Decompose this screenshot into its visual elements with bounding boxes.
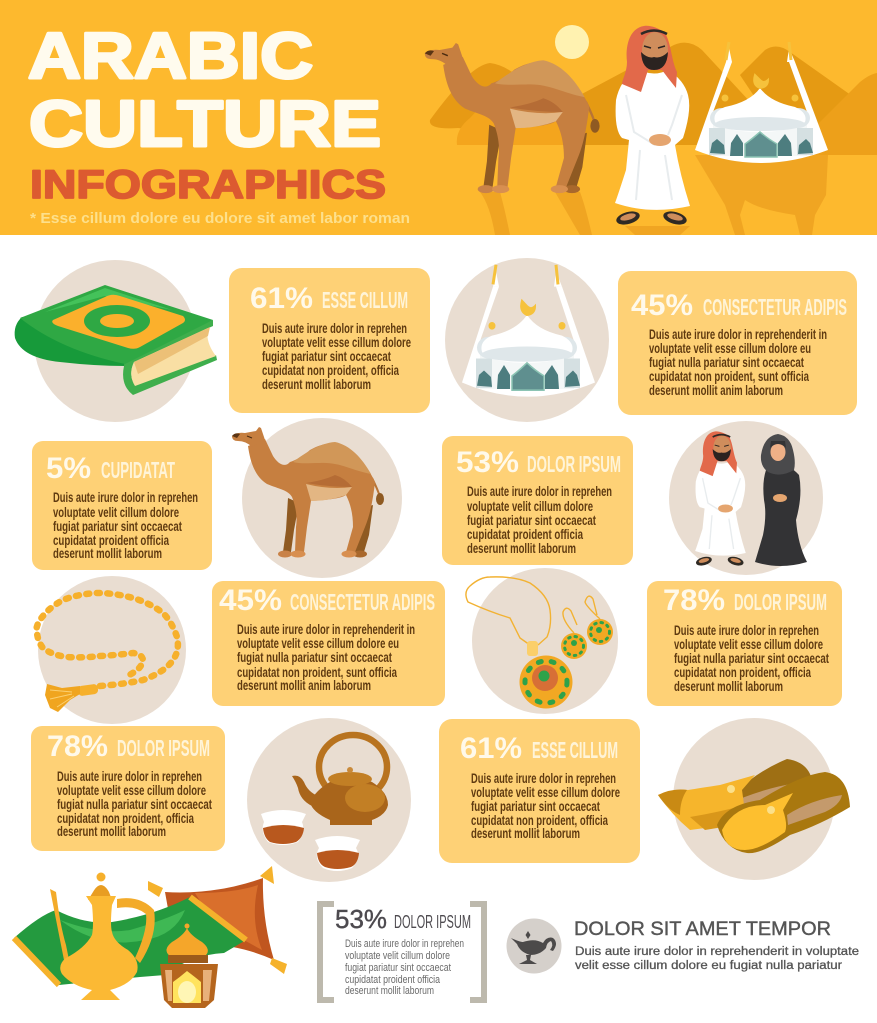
panel: 61% esse cillum second: deserunt mollit laborum (471, 826, 580, 841)
man (695, 431, 746, 567)
icon: holy book (15, 260, 217, 422)
bracket panel: 53% dolor ipsum: Duis aute irure dolor in reprehen (345, 938, 464, 950)
icon: slippers (658, 718, 850, 880)
camel (425, 43, 600, 193)
panel: 61% esse cillum: cupidatat non proident, officia (262, 363, 399, 378)
panel: 5% cupidatat: deserunt mollit laborum (53, 546, 162, 561)
panel: 61% esse cillum: deserunt mollit laborum (262, 377, 371, 392)
bracket panel: 53% dolor ipsum: voluptate velit cillum dolore (345, 950, 450, 962)
icon: teapot and cups (247, 718, 411, 882)
panel: 5% cupidatat: cupidatat proident officia (53, 533, 169, 548)
illustration: jug, pillows and lantern (14, 866, 287, 1008)
bracket panel: 53% dolor ipsum: fugiat pariatur sint occaecat (345, 962, 451, 974)
panel: 5% cupidatat (32, 441, 212, 570)
panel: 45% consectetur adipis second: CONSECTETUR ADIPIS (290, 589, 435, 615)
bracket panel: 53% dolor ipsum: 53% (335, 904, 387, 934)
panel: 61% esse cillum second: Duis aute irure dolor in reprehen (471, 771, 616, 786)
panel: 45% consectetur adipis second: fugiat nulla pariatur sint occaecat (237, 650, 392, 665)
panel: 45% consectetur adipis second: voluptate velit esse cillum dolore eu (237, 636, 399, 651)
panel: 61% esse cillum: voluptate velit esse cillum dolore (262, 335, 411, 350)
man in white robe (615, 26, 690, 227)
panel: 78% dolor ipsum left (31, 726, 225, 851)
panel: 45% consectetur adipis (618, 271, 857, 415)
panel: 61% esse cillum (229, 268, 430, 413)
panel: 45% consectetur adipis second: deserunt mollit anim laborum (237, 678, 371, 693)
panel: 53% dolor ipsum: cupidatat proident officia (467, 527, 583, 542)
header banner (0, 0, 877, 235)
mosque (695, 42, 828, 163)
panel: 53% dolor ipsum: 53% (456, 446, 519, 479)
panel: 53% dolor ipsum: fugiat pariatur sint occaecat (467, 513, 596, 528)
icon: magic lamp (506, 918, 562, 974)
sun (555, 25, 589, 59)
red pillow (148, 866, 287, 974)
panel: 61% esse cillum second: 61% (460, 732, 522, 765)
bracket panel: 53% dolor ipsum (320, 904, 484, 1000)
panel: 61% esse cillum: ESSE CILLUM (322, 287, 408, 313)
panel: 45% consectetur adipis second: Duis aute irure dolor in reprehenderit in (237, 622, 415, 637)
icon: prayer beads (36, 576, 186, 724)
bracket panel: 53% dolor ipsum: DOLOR IPSUM (394, 912, 471, 932)
panel: 5% cupidatat: fugiat pariatur sint occaecat (53, 519, 182, 534)
green pillow (14, 897, 246, 985)
callout text (575, 946, 859, 972)
panel: 61% esse cillum second: ESSE CILLUM (532, 737, 618, 763)
panel: 53% dolor ipsum: voluptate velit cillum dolore (467, 499, 593, 514)
icon: couple in circle (669, 421, 823, 575)
panel: 78% dolor ipsum right: 78% (663, 584, 725, 617)
panel: 78% dolor ipsum left: cupidatat non proident, officia (57, 811, 194, 826)
panel: 78% dolor ipsum left: voluptate velit esse cillum dolore (57, 783, 206, 798)
panel: 61% esse cillum: Duis aute irure dolor in reprehen (262, 321, 407, 336)
callout text: velit esse cillum dolore eu fugiat nulla pariatur (575, 960, 842, 972)
icon: mosque in circle (445, 258, 609, 422)
panel: 78% dolor ipsum left: Duis aute irure dolor in reprehen (57, 769, 202, 784)
panel: 78% dolor ipsum right: cupidatat non proident, officia (674, 665, 811, 680)
title: Culture: CULTURE (29, 87, 381, 160)
panel: 45% consectetur adipis: 45% (631, 289, 693, 322)
panel: 5% cupidatat: Duis aute irure dolor in reprehen (53, 490, 198, 505)
panel: 45% consectetur adipis: voluptate velit esse cillum dolore eu (649, 341, 811, 356)
panel: 53% dolor ipsum: deserunt mollit laborum (467, 541, 576, 556)
panel: 78% dolor ipsum left: DOLOR IPSUM (117, 735, 210, 761)
panel: 61% esse cillum: 61% (250, 282, 313, 315)
panel: 53% dolor ipsum: DOLOR IPSUM (527, 451, 621, 477)
icon: camel in circle (232, 418, 402, 578)
panel: 45% consectetur adipis second: 45% (219, 584, 282, 617)
panel: 61% esse cillum second: cupidatat non proident, officia (471, 813, 608, 828)
panel: 45% consectetur adipis: cupidatat non proident, sunt officia (649, 369, 809, 384)
panel: 61% esse cillum: fugiat pariatur sint occaecat (262, 349, 391, 364)
panel: 45% consectetur adipis second: cupidatat non proident, sunt officia (237, 665, 397, 680)
desert dunes (430, 43, 877, 155)
bracket panel: 53% dolor ipsum: cupidatat proident officia (345, 974, 441, 986)
subtitle: * Esse cillum dolore eu dolore sit amet labor roman (30, 210, 410, 227)
panel: 61% esse cillum second (439, 719, 640, 863)
panel: 78% dolor ipsum left: deserunt mollit laborum (57, 824, 166, 839)
panel: 45% consectetur adipis: fugiat nulla pariatur sint occaecat (649, 355, 804, 370)
icon: jewelry (466, 568, 618, 714)
panel: 5% cupidatat: 5% (46, 452, 91, 485)
panel: 53% dolor ipsum: Duis aute irure dolor in reprehen (467, 484, 612, 499)
panel: 61% esse cillum second: fugiat pariatur sint occaecat (471, 799, 600, 814)
panel: 5% cupidatat: voluptate velit cillum dolore (53, 505, 179, 520)
panel: 45% consectetur adipis second (212, 581, 445, 706)
panel: 45% consectetur adipis: deserunt mollit anim laborum (649, 383, 783, 398)
bracket panel: 53% dolor ipsum: deserunt mollit laborum (345, 985, 434, 997)
callout text: Duis aute irure dolor in reprehenderit in voluptate (575, 946, 859, 958)
title: Infographics: INFOGRAPHICS (30, 163, 386, 207)
panel: 78% dolor ipsum left: fugiat nulla pariatur sint occaecat (57, 797, 212, 812)
ground reflections (480, 155, 828, 235)
lantern (160, 924, 218, 1008)
panel: 78% dolor ipsum right: deserunt mollit laborum (674, 679, 783, 694)
panel: 61% esse cillum second: voluptate velit esse cillum dolore (471, 785, 620, 800)
panel: 53% dolor ipsum (442, 436, 633, 565)
woman (755, 434, 807, 566)
panel: 78% dolor ipsum left: 78% (47, 730, 108, 763)
title: Arabic: ARABIC (28, 19, 313, 92)
panel: 5% cupidatat: CUPIDATAT (101, 457, 175, 483)
panel: 78% dolor ipsum right (647, 581, 842, 706)
callout heading: DOLOR SIT AMET TEMPOR (574, 919, 831, 940)
gold jug (50, 872, 155, 1000)
